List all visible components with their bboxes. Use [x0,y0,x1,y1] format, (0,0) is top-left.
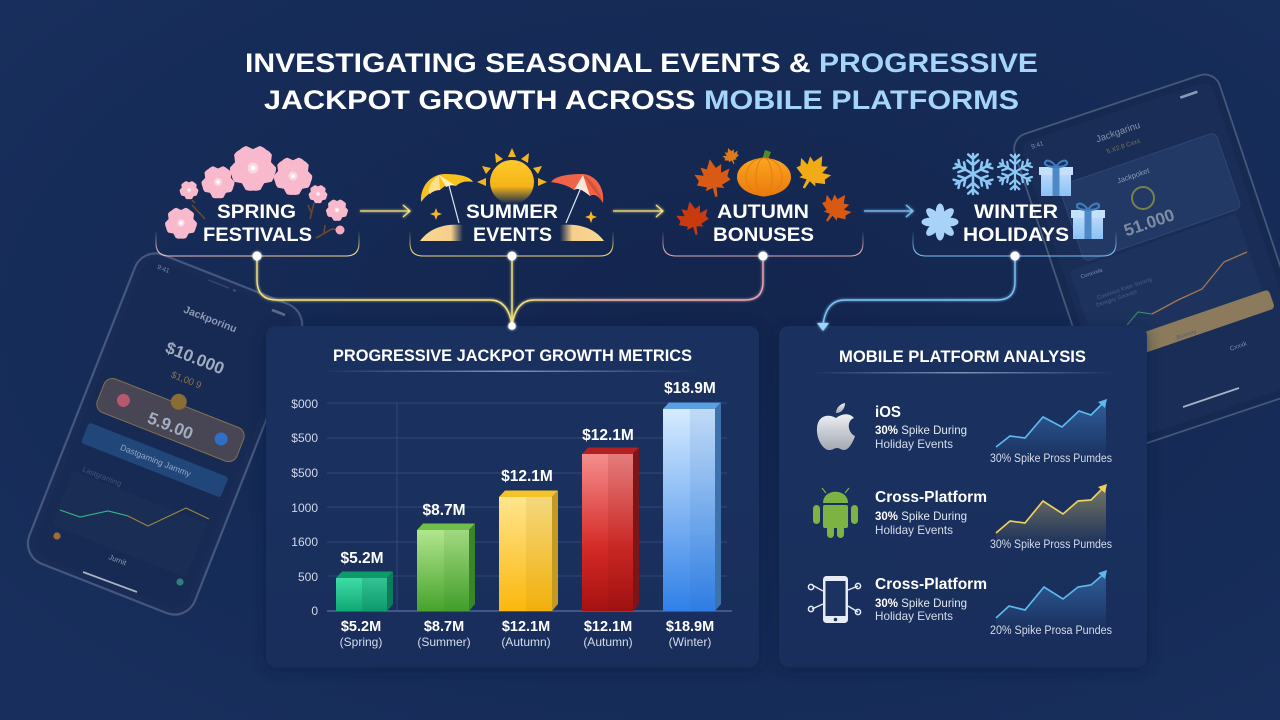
row text: cross-platform one [875,489,987,537]
season card frames [155,231,1116,256]
bar: spring [336,572,393,611]
row text: cross-platform one: Cross-Platform [875,489,987,506]
bar value labels: $5.2M [340,550,384,567]
phone mockup: left background: Dastgaming Jammy [119,442,193,479]
row text: cross-platform one: Holiday Events [875,523,953,537]
y axis labels: $500 [291,431,318,445]
icon: spring blossoms [163,146,349,241]
label: winter holidays [963,201,1069,246]
row text: cross-platform two: 30% Spike During [875,596,967,610]
season labels: (Summer) [417,635,471,649]
label: winter holidays: WINTER [974,201,1058,223]
connector: winter to platform analysis [817,256,1015,331]
label: winter holidays: HOLIDAYS [963,224,1069,246]
icon: connected phone [808,576,861,623]
title: JACKPOT GROWTH ACROSS MOBILE PLATFORMS [264,85,1019,115]
row text: iOS: Holiday Events [875,437,953,451]
phone mockup: left background: 9:41 [156,264,171,275]
sparkline: iOS: 30% Spike Pross Pumdes [990,453,1112,465]
axis value labels: $12.1M [584,619,632,635]
tablet mockup: right background: 9:41 [1030,140,1045,151]
y axis labels: 500 [298,570,318,584]
row text: iOS: 30% Spike During [875,423,967,437]
arrow: autumn to winter [864,205,913,217]
row text: cross-platform one: 30% Spike During [875,509,967,523]
icon: apple [817,403,855,450]
y axis labels: $500 [291,466,318,480]
tablet mockup: right background: 5.X2.8 Cxxs [1106,137,1142,156]
bar: autumn [499,490,558,611]
tablet mockup: right background: Buxxxxy [1176,329,1198,341]
tablet mockup: right background: Stepe 6 [1219,223,1239,235]
phone mockup: left background: Lastgraming [81,465,123,488]
label: summer events: EVENTS [473,224,552,246]
bar value labels [340,380,716,567]
axis value labels: $8.7M [424,619,464,635]
bar: autumn second [582,448,639,611]
bar value labels: $8.7M [422,502,466,519]
sparkline: cross-platform two [990,570,1112,637]
bar: summer [417,524,475,611]
axis value labels: $5.2M [341,619,381,635]
label: spring festivals [203,201,312,246]
season labels: (Spring) [340,635,382,649]
label: autumn bonuses: BONUSES [713,224,814,246]
phone mockup: left background: Jurnit [107,552,129,568]
phone mockup: left background: $10.000 [163,338,227,378]
label: autumn bonuses [713,201,814,246]
bar value labels: $12.1M [501,468,553,485]
row text: iOS [875,404,967,451]
connectors: seasons to jackpot metrics [257,256,763,326]
phone mockup: left background: Jackporinu [182,304,238,335]
tablet mockup: right background [1010,70,1280,454]
title: INVESTIGATING SEASONAL EVENTS & PROGRESSIVE [245,48,1038,78]
y axis labels: 1600 [291,535,318,549]
tablet mockup: right background: Conxxxla [1080,267,1104,281]
arrow: summer to autumn [613,205,663,217]
bar value labels: $18.9M [664,380,716,397]
icon: android [813,488,858,538]
panel: mobile platform analysis [779,326,1147,669]
season labels: (Autumn) [501,635,551,649]
bar chart: jackpot growth by season [291,380,732,649]
row text: iOS: iOS [875,404,901,421]
sparkline: cross-platform two: 20% Spike Prosa Pundes [990,625,1112,637]
row text: cross-platform two: Holiday Events [875,609,953,623]
sparkline: iOS [990,399,1112,465]
connector nodes [252,252,1020,330]
bar value labels: $12.1M [582,427,634,444]
icon: autumn pumpkin and leaves [674,145,857,238]
row text: cross-platform two: Cross-Platform [875,576,987,593]
axis value labels: $18.9M [666,619,714,635]
y axis labels: 0 [311,604,318,618]
arrow: spring to summer [360,205,410,217]
label: summer events: SUMMER [466,201,558,223]
panel: progressive jackpot growth metrics [266,326,759,669]
axis value labels: $12.1M [502,619,550,635]
phone mockup: left background: $1,00 9 [169,370,203,391]
label: spring festivals: SPRING [217,201,296,223]
icon: winter snowflakes and gifts [922,154,1105,240]
tablet mockup: right background: Jackpoket [1116,166,1151,185]
panel heading: jackpot metrics: PROGRESSIVE JACKPOT GROWTH METRICS [333,347,692,365]
label: spring festivals: FESTIVALS [203,224,312,246]
axis value labels [341,619,714,635]
icon: summer sun, umbrellas and sand [420,148,604,241]
season labels [340,635,711,649]
y axis labels: $000 [291,397,318,411]
tablet mockup: right background: Dxxxgxy Sxxxxes [1095,289,1138,309]
label: autumn bonuses: AUTUMN [717,201,809,223]
tablet mockup: right background: 51.000 [1122,205,1177,240]
tablet mockup: right background: Cuxxxxxs Xxter Sxxxng [1097,277,1153,301]
season labels: (Autumn) [583,635,633,649]
season labels: (Winter) [669,635,711,649]
title [245,48,1038,115]
bar: winter [663,402,721,611]
phone mockup: left background [21,247,309,621]
panel heading: platform analysis: MOBILE PLATFORM ANALYSIS [839,348,1086,366]
tablet mockup: right background: Jackgarinu [1095,120,1142,145]
sparkline: cross-platform one [990,484,1112,551]
tablet mockup: right background: Cxxxk [1229,340,1249,353]
row text: cross-platform two [875,576,987,623]
phone mockup: left background: 5.9.00 [145,408,196,443]
sparkline: cross-platform one: 30% Spike Pross Pumdes [990,539,1112,551]
label: summer events [466,201,558,246]
y axis labels: 1000 [291,501,318,515]
y axis labels [291,397,318,618]
